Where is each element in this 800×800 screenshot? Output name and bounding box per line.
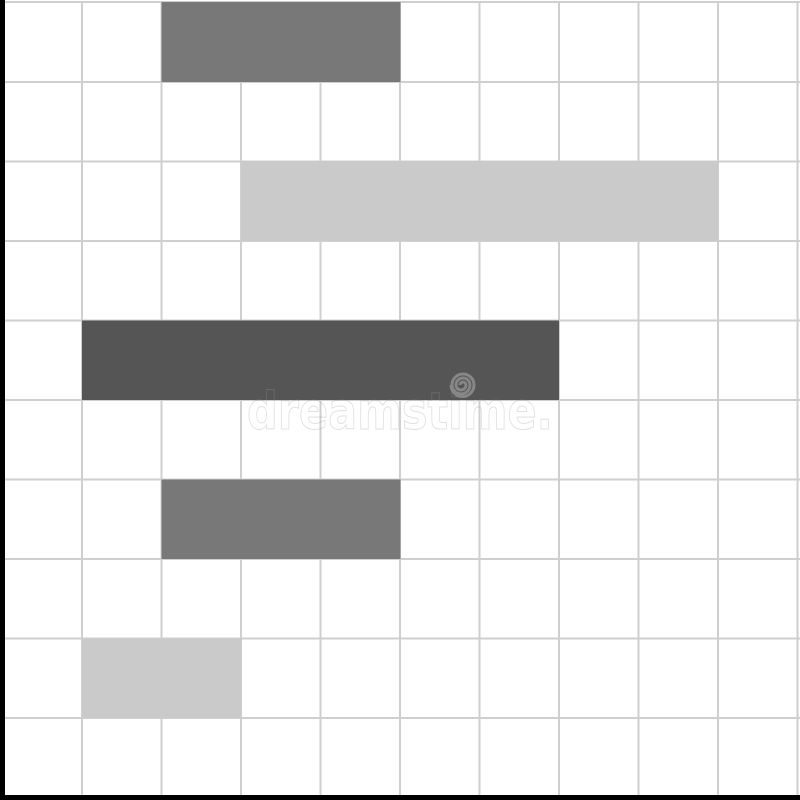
watermark: text: dreamstime. bbox=[247, 382, 553, 442]
y axis bbox=[0, 0, 5, 800]
bar: row 5, light grey bbox=[82, 638, 242, 718]
bar: row 2, light grey bbox=[241, 161, 718, 241]
bar: row 3, dark grey bbox=[82, 320, 559, 400]
x axis bbox=[0, 795, 800, 800]
bar: row 4, medium grey bbox=[162, 480, 400, 559]
bar: row 1, medium grey bbox=[162, 2, 400, 82]
watermark: spiral logo bbox=[451, 374, 474, 396]
